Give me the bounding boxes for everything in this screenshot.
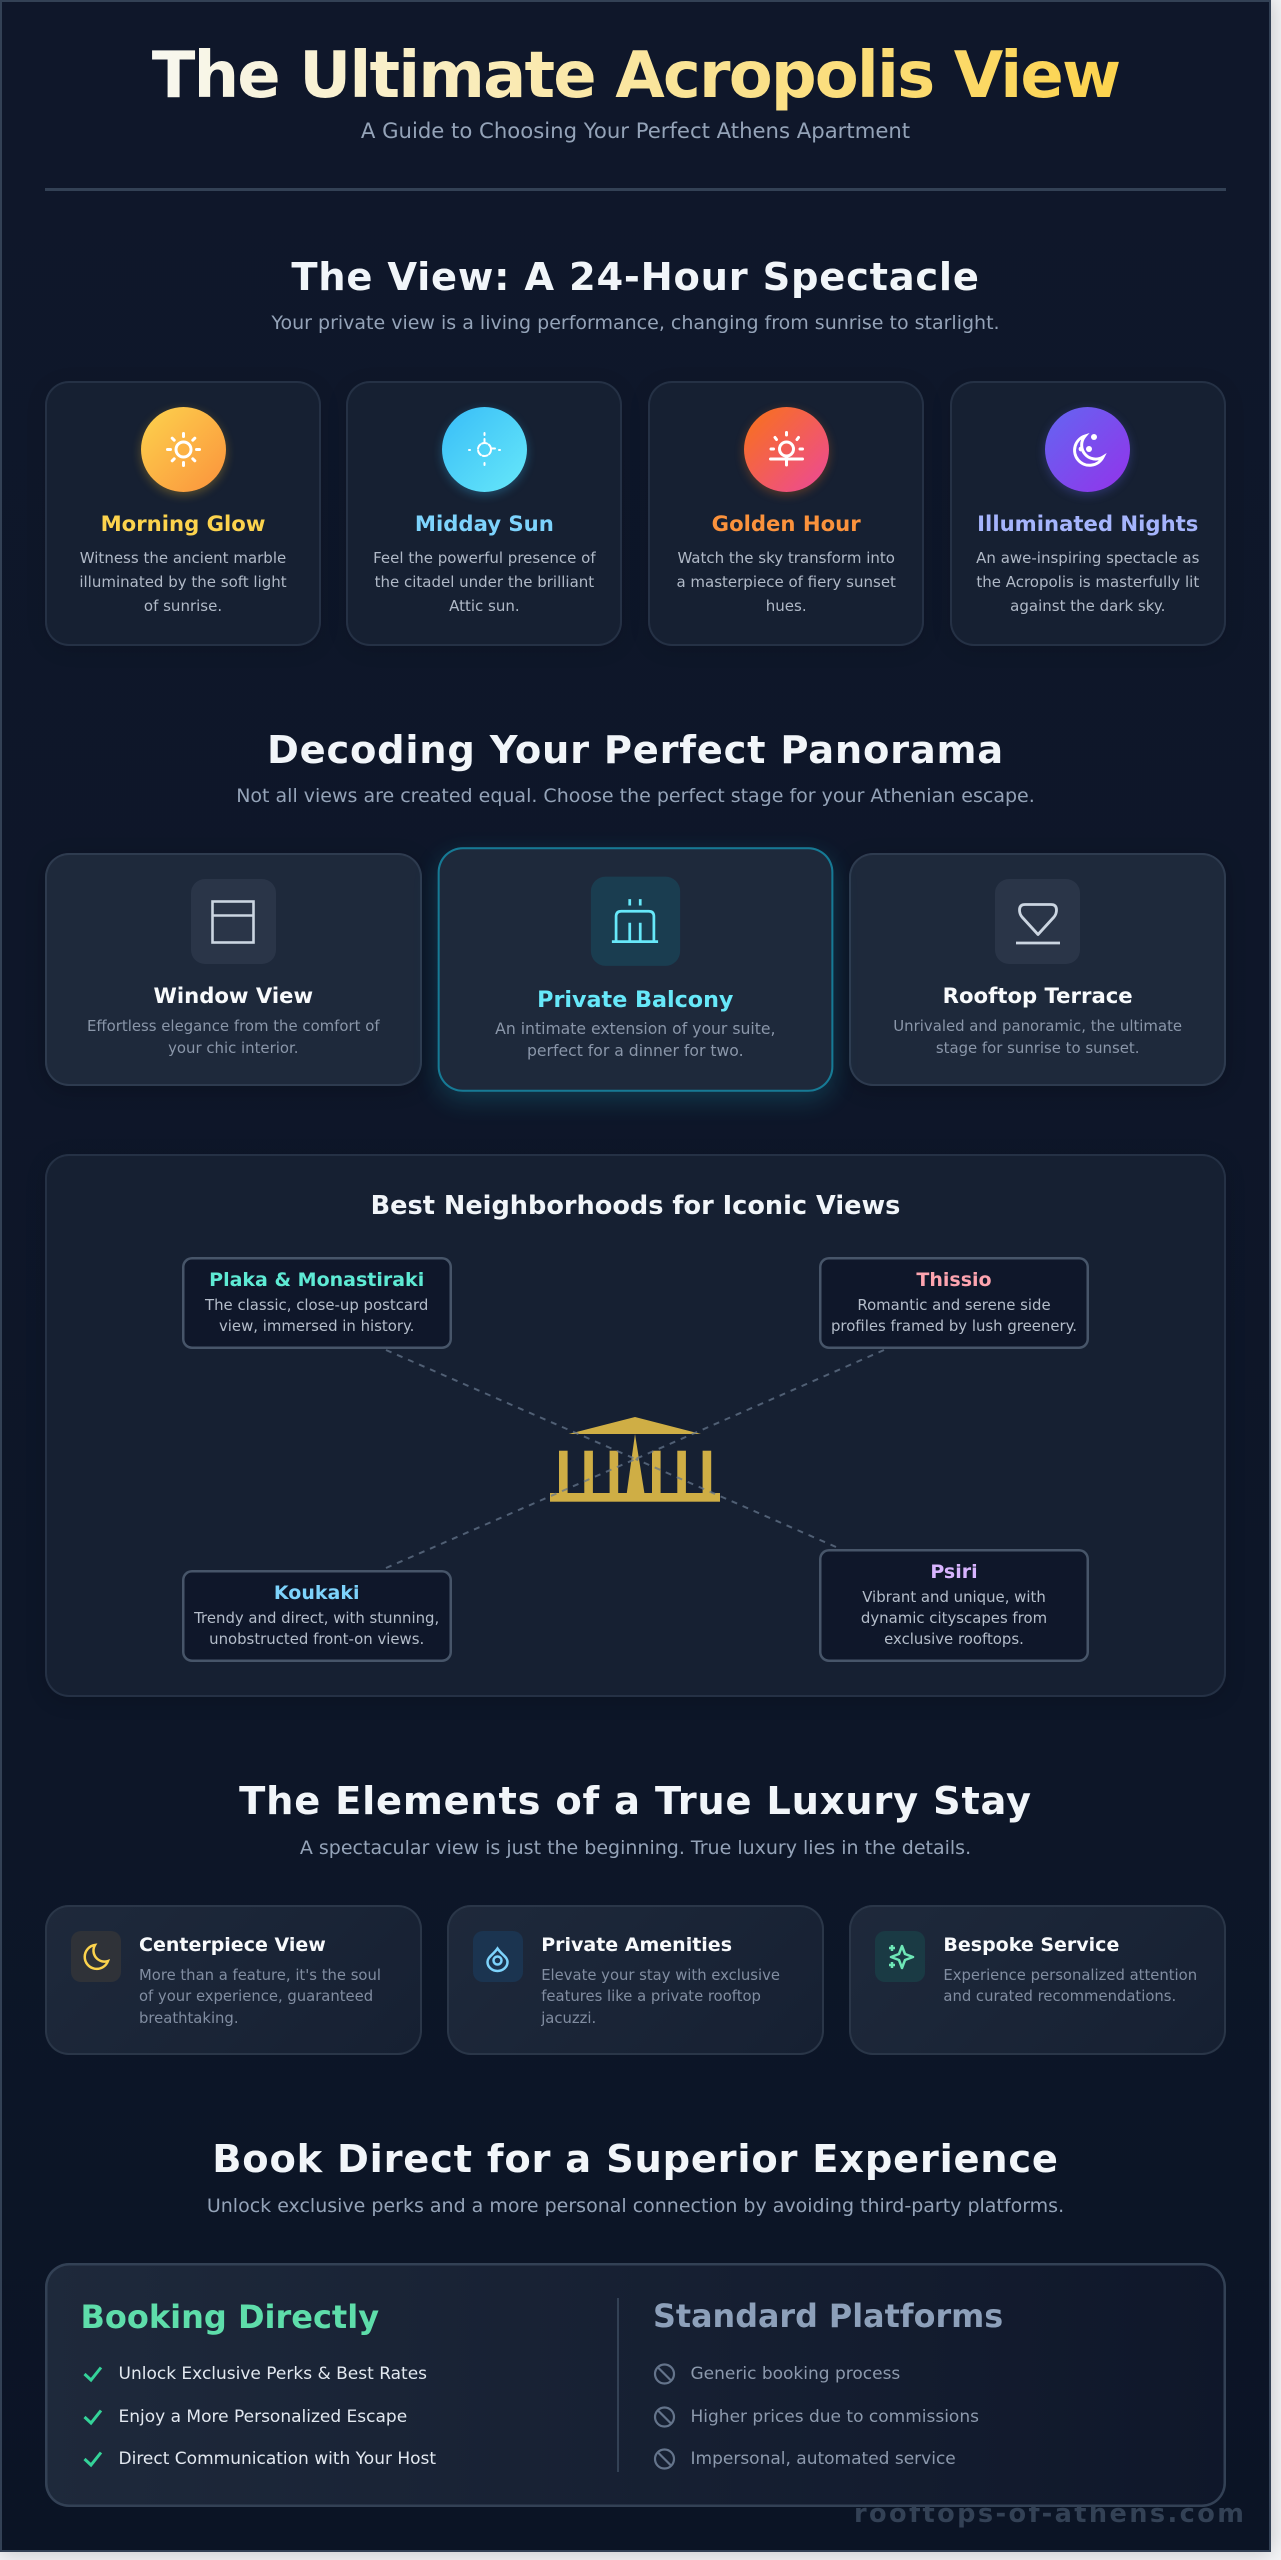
name: Koukaki (274, 1582, 359, 1604)
description: unobstructed front-on views. (209, 1630, 424, 1648)
card text: illuminated by the soft light (79, 573, 287, 591)
card text: jacuzzi. (541, 2010, 596, 2027)
description: exclusive rooftops. (884, 1630, 1024, 1648)
neighborhood: Thissio (819, 1257, 1089, 1349)
card text (79, 548, 287, 615)
card text (541, 1967, 780, 2027)
benefit 3: Direct Communication with Your Host (118, 2449, 436, 2469)
subheading: luxury stay: A spectacular view is just the beginning. True luxury lies in the details. (300, 1836, 971, 1858)
card text: Unrivaled and panoramic, the ultimate (893, 1016, 1182, 1034)
card text: Watch the sky transform into (677, 548, 895, 566)
card text: of your experience, guaranteed (139, 1988, 373, 2005)
card title: Midday Sun (415, 511, 554, 536)
card title: Illuminated Nights (977, 511, 1198, 536)
name: Plaka & Monastiraki (209, 1269, 424, 1291)
card title: Private Amenities (541, 1934, 732, 1956)
card text: perfect for a dinner for two. (527, 1041, 744, 1060)
description (831, 1296, 1077, 1335)
icon: sun (140, 407, 226, 492)
card text: a masterpiece of fiery sunset (676, 573, 896, 591)
card text (139, 1967, 381, 2027)
neighborhood: Psiri (819, 1549, 1089, 1662)
title: The Ultimate Acropolis View (152, 39, 1119, 113)
icon: balcony (591, 876, 680, 965)
card text: Witness the ancient marble (80, 548, 286, 566)
card text: the citadel under the brilliant (375, 573, 594, 591)
card text: Elevate your stay with exclusive (541, 1967, 780, 1984)
card text: hues. (766, 597, 807, 615)
subheading: panorama: Not all views are created equal. Choose the perfect stage for your Athenian escape. (236, 784, 1035, 806)
card: morning glow (45, 381, 321, 646)
description: Romantic and serene side (857, 1296, 1051, 1314)
description (194, 1609, 439, 1648)
card text: stage for sunrise to sunset. (936, 1038, 1140, 1056)
card title: Bespoke Service (943, 1934, 1119, 1956)
card title: Rooftop Terrace (943, 983, 1133, 1008)
subtitle: A Guide to Choosing Your Perfect Athens Apartment (361, 118, 910, 143)
card text: and curated recommendations. (943, 1988, 1176, 2005)
watermark: rooftops-of-athens.com (854, 2499, 1246, 2529)
description (204, 1296, 428, 1335)
subheading: book direct: Unlock exclusive perks and a more personal connection by avoiding third-party platforms. (207, 2194, 1064, 2216)
name: Psiri (930, 1561, 978, 1583)
map diagram (386, 1349, 884, 1569)
card: illuminated nights (950, 381, 1226, 646)
card text: against the dark sky. (1010, 597, 1165, 615)
icon: window (191, 879, 276, 964)
card title: Private Balcony (537, 985, 734, 1012)
card text: Experience personalized attention (943, 1967, 1197, 1984)
panel: booking comparison (45, 2263, 1226, 2507)
card: bespoke service (849, 1905, 1226, 2055)
card text: Effortless elegance from the comfort of (87, 1016, 380, 1034)
icon: midday sun (442, 407, 527, 492)
drawback 3: Impersonal, automated service (690, 2449, 956, 2469)
heading: panorama: Decoding Your Perfect Panorama (267, 728, 1004, 772)
card text: More than a feature, it's the soul (139, 1967, 381, 1984)
description (861, 1588, 1047, 1648)
card text: Attic sun. (449, 597, 520, 615)
card text: An awe-inspiring spectacle as (976, 548, 1199, 566)
description: Trendy and direct, with stunning, (194, 1609, 439, 1627)
benefit 2: Enjoy a More Personalized Escape (118, 2406, 407, 2426)
subheading: the view: Your private view is a living performance, changing from sunrise to starlight. (271, 312, 1000, 334)
card title: Window View (153, 983, 313, 1008)
description: Vibrant and unique, with (862, 1588, 1046, 1606)
card text (495, 1019, 776, 1060)
card title: Centerpiece View (139, 1934, 326, 1956)
description: dynamic cityscapes from (861, 1609, 1047, 1627)
icon: sparkles (875, 1931, 925, 1982)
card text: An intimate extension of your suite, (495, 1019, 776, 1038)
dashed connectors (386, 1350, 884, 1568)
neighborhood: Koukaki (182, 1570, 452, 1662)
description: profiles framed by lush greenery. (831, 1317, 1077, 1335)
card text (893, 1016, 1182, 1056)
neighborhood: Plaka & Monastiraki (182, 1257, 452, 1349)
drawback 2: Higher prices due to commissions (690, 2406, 979, 2426)
icon: temple (550, 1417, 720, 1502)
icon: rooftop (995, 879, 1080, 964)
card: rooftop terrace (849, 853, 1226, 1086)
card text (676, 548, 896, 615)
card: window view (45, 853, 422, 1086)
description: view, immersed in history. (219, 1317, 414, 1335)
card: golden hour (648, 381, 924, 646)
card: private balcony (featured) (438, 847, 833, 1092)
panel heading: Best Neighborhoods for Iconic Views (371, 1190, 900, 1220)
card text: of sunrise. (144, 597, 222, 615)
icon: sunset (744, 407, 829, 492)
card: midday sun (346, 381, 622, 646)
icon: crescent moon (71, 1931, 121, 1982)
icon: moon and stars (1045, 407, 1130, 492)
column: booking directly (80, 2298, 436, 2469)
card text: features like a private rooftop (541, 1988, 761, 2005)
card text: breathtaking. (139, 2010, 239, 2027)
column: standard platforms (653, 2298, 1003, 2470)
card title: Golden Hour (712, 511, 861, 536)
column heading: Booking Directly (80, 2298, 379, 2336)
benefit 1: Unlock Exclusive Perks & Best Rates (118, 2364, 427, 2384)
heading: book direct: Book Direct for a Superior Experience (212, 2137, 1059, 2182)
card title: Morning Glow (101, 511, 265, 536)
card text (943, 1967, 1197, 2005)
name: Thissio (916, 1269, 992, 1291)
description: The classic, close-up postcard (205, 1296, 428, 1314)
card: private amenities (447, 1905, 824, 2055)
panel: best neighborhoods (45, 1154, 1226, 1697)
card text (373, 548, 596, 615)
card text (87, 1016, 380, 1056)
heading: the view: The View: A 24-Hour Spectacle (291, 255, 980, 300)
drawback 1: Generic booking process (690, 2364, 900, 2384)
heading: luxury stay: The Elements of a True Luxury Stay (239, 1779, 1032, 1824)
column heading: Standard Platforms (653, 2298, 1003, 2335)
card text (976, 548, 1199, 615)
card text: the Acropolis is masterfully lit (976, 573, 1199, 591)
card text: Feel the powerful presence of (373, 548, 596, 566)
card: centerpiece view (45, 1905, 422, 2055)
card text: your chic interior. (168, 1038, 298, 1056)
icon: water drop (473, 1931, 523, 1982)
